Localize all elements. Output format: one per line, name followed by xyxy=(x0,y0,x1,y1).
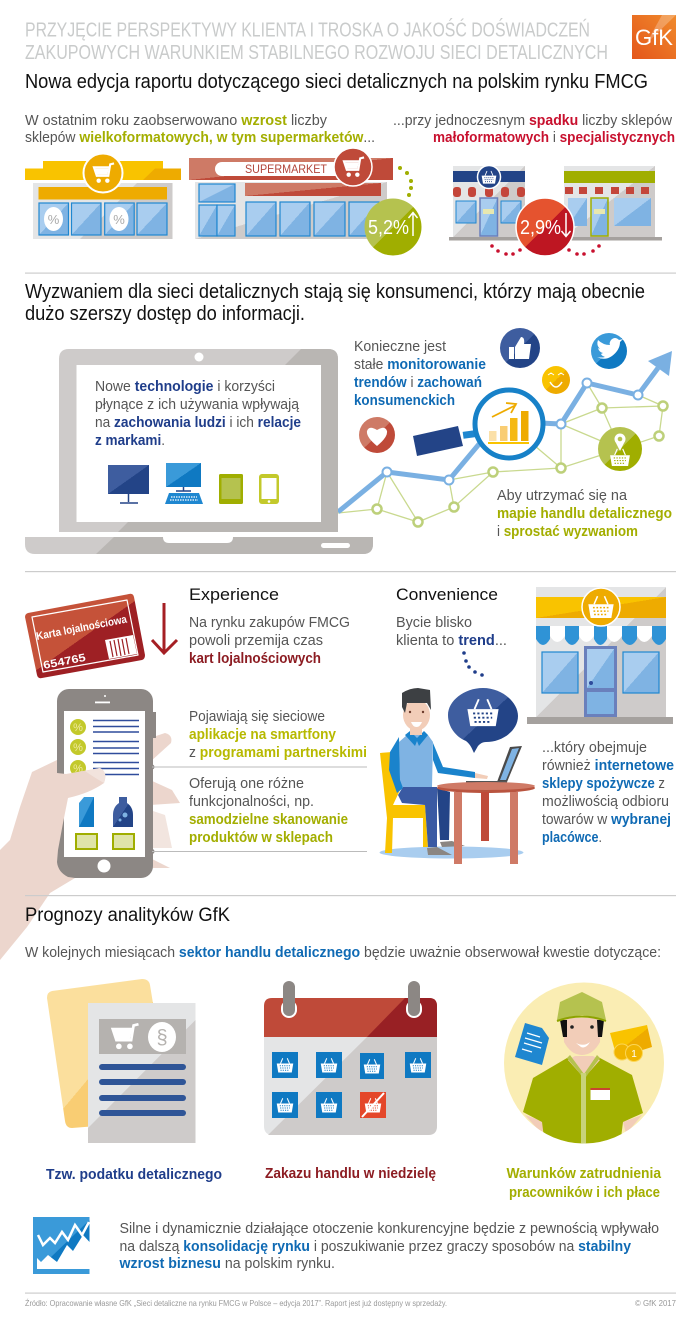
text: online stores: towarów w wybranej xyxy=(542,811,671,828)
growth network chart xyxy=(338,351,672,526)
text: staying on the map: mapie handlu detalicznego xyxy=(497,505,672,522)
icon: loyalty card xyxy=(25,594,145,678)
label: tax: Tzw. podatku detalicznego xyxy=(46,1166,222,1183)
growth callout 5,2%: 5,2% xyxy=(368,217,409,239)
text: growth: sklepów wielkoformatowych, w tym supermarketów... xyxy=(25,129,375,146)
text: conclusion: wzrost biznesu na polskim rynku. xyxy=(119,1255,335,1272)
header xyxy=(25,15,676,64)
text: growth: W ostatnim roku zaobserwowano wzrost liczby xyxy=(25,112,327,129)
leader line: functions xyxy=(150,849,367,854)
panel: experience xyxy=(0,585,367,960)
text: functions: Oferują one różne xyxy=(189,775,304,792)
text: online stores: sklepy spożywcze z xyxy=(542,775,665,792)
laptop xyxy=(25,349,373,554)
icon: smartphone app: % xyxy=(73,763,83,775)
icon: loyalty card: Karta lojalnościowa xyxy=(35,613,129,643)
text: decline xyxy=(393,112,675,146)
illustration: worker: 1 xyxy=(631,1049,637,1060)
text: trend xyxy=(396,614,507,649)
store base strip xyxy=(449,237,662,240)
text: online stores: placówce. xyxy=(542,829,602,846)
text: growth xyxy=(25,112,375,146)
icon: hypermarket store xyxy=(25,154,181,239)
icon: speech bubble basket xyxy=(448,688,518,753)
icon: small store green xyxy=(564,166,655,237)
decline callout 2,9%: 2,9% xyxy=(520,217,561,239)
icon: hypermarket store: % xyxy=(48,212,60,227)
icon: tablet xyxy=(219,474,243,504)
icon: smartphone app: % xyxy=(73,742,83,754)
text: monitoring xyxy=(354,338,486,409)
text: loyalty cards xyxy=(189,614,350,667)
source note: Źródło: Opracowanie własne GfK „Sieci detaliczne na rynku FMCG w Polsce – edycja 2017”. Raport jest już dostępny w sprzedaży. xyxy=(25,1298,447,1308)
growth callout 5,2% xyxy=(364,166,422,256)
text: decline: ...przy jednoczesnym spadku liczby sklepów xyxy=(393,112,672,129)
icon: monitor xyxy=(108,465,149,503)
text: online stores xyxy=(542,739,674,846)
text: staying on the map: Aby utrzymać się na xyxy=(497,487,628,504)
text: functions: funkcjonalności, np. xyxy=(189,793,314,810)
text: trend: Bycie blisko xyxy=(396,614,472,631)
text: apps xyxy=(189,708,367,761)
heading: convenience: Convenience xyxy=(396,585,498,604)
text: apps: z programami partnerskimi xyxy=(189,744,367,761)
icon: smiley xyxy=(542,366,570,394)
heading: new report: Nowa edycja raportu dotyczącego sieci detalicznych na polskim rynku FMCG xyxy=(25,71,648,93)
text: monitoring: stałe monitorowanie xyxy=(354,356,486,373)
text: loyalty cards: Na rynku zakupów FMCG xyxy=(189,614,350,631)
hand palm and thumb xyxy=(0,760,105,960)
icon: small store blue xyxy=(453,166,525,237)
text: monitoring: trendów i zachowań xyxy=(354,374,482,391)
heading: consumers xyxy=(25,281,645,325)
copyright: © GfK 2017 xyxy=(635,1298,676,1308)
text: decline: małoformatowych i specjalistycznych xyxy=(433,129,675,146)
divider xyxy=(25,1292,676,1294)
icon: smartphone app xyxy=(57,689,156,878)
arrow: decline xyxy=(152,603,177,653)
icon: tax document: § xyxy=(156,1027,168,1049)
divider xyxy=(25,571,676,572)
text: functions xyxy=(189,775,348,846)
text: laptop screen: Nowe technologie i korzyści xyxy=(95,378,275,395)
text: monitoring: Konieczne jest xyxy=(354,338,447,355)
icon: loyalty card: 654765 xyxy=(42,652,87,672)
label: employment xyxy=(506,1165,662,1201)
icon: supermarket store xyxy=(189,148,393,239)
heading: consumers: dużo szerszy dostęp do informacji. xyxy=(25,303,305,325)
icon: twitter xyxy=(591,333,627,369)
icon: smartphone xyxy=(259,474,279,504)
text: monitoring: konsumenckich xyxy=(354,392,455,409)
heading: forecasts: Prognozy analityków GfK xyxy=(25,905,230,926)
icon: heart xyxy=(359,417,395,453)
icon: desktop computer xyxy=(165,463,203,504)
text: apps: aplikacje na smartfony xyxy=(189,726,337,743)
text: online stores: ...który obejmuje xyxy=(542,739,647,756)
label: sunday trade ban: Zakazu handlu w niedzielę xyxy=(265,1165,436,1182)
dots xyxy=(462,651,484,677)
text: staying on the map xyxy=(497,487,672,540)
text: loyalty cards: powoli przemija czas xyxy=(189,632,323,649)
text: staying on the map: i sprostać wyzwaniom xyxy=(497,523,638,540)
GfK logo xyxy=(632,15,676,59)
text: trend: klienta to trend... xyxy=(396,632,507,649)
text: conclusion: Silne i dynamicznie działające otoczenie konkurencyjne będzie z pewnością wpływało xyxy=(120,1220,659,1237)
icon: hypermarket store: % xyxy=(113,212,125,227)
text: conclusion xyxy=(119,1220,659,1272)
icon: calendar xyxy=(264,981,437,1135)
icon: magnifier with bars xyxy=(413,390,543,458)
hand fingers behind phone xyxy=(150,733,180,868)
leader line: apps xyxy=(150,764,367,770)
text: online stores: możliwością odbioru xyxy=(542,793,669,810)
icon: growth chart xyxy=(33,1217,90,1274)
title xyxy=(25,18,608,64)
text: apps: Pojawiają się sieciowe xyxy=(189,708,325,725)
illustration: man at table xyxy=(380,688,535,864)
icon: convenience store xyxy=(527,587,673,724)
decline callout 2,9% xyxy=(490,198,601,256)
heading: experience: Experience xyxy=(189,585,279,604)
label: employment: pracowników i ich płace xyxy=(509,1184,660,1201)
text: laptop screen: z markami. xyxy=(95,432,165,449)
text: functions: samodzielne skanowanie xyxy=(189,811,348,828)
text: loyalty cards: kart lojalnościowych xyxy=(189,650,321,667)
icon: tax document xyxy=(47,979,196,1143)
heading: consumers: Wyzwaniem dla sieci detalicznych stają się konsumenci, którzy mają obecnie xyxy=(25,281,645,303)
divider xyxy=(25,895,676,896)
illustration: worker xyxy=(504,982,664,1146)
text: conclusion: na dalszą konsolidację rynku i poszukiwanie przez graczy sposobów na stabilny xyxy=(120,1238,632,1255)
icon: facebook like xyxy=(500,328,540,368)
text: laptop screen xyxy=(95,378,301,449)
text: forecast intro: W kolejnych miesiącach sektor handlu detalicznego będzie uważnie obserwował kwestie dotyczące: xyxy=(25,944,661,961)
panel: convenience xyxy=(380,585,674,864)
text: laptop screen: płynące z ich używania wpływają xyxy=(95,396,300,413)
label: employment: Warunków zatrudnienia xyxy=(506,1165,662,1182)
icon: map pin basket xyxy=(598,427,642,471)
divider xyxy=(25,272,676,274)
panel: stores intro text xyxy=(25,112,675,146)
GfK logo: GfK xyxy=(635,25,673,50)
text: laptop screen: na zachowania ludzi i ich relacje xyxy=(95,414,301,431)
icon: smartphone app: % xyxy=(73,722,83,734)
text: functions: produktów w sklepach xyxy=(189,829,333,846)
icon: supermarket store: SUPERMARKET xyxy=(245,162,328,176)
text: online stores: również internetowe xyxy=(542,757,674,774)
